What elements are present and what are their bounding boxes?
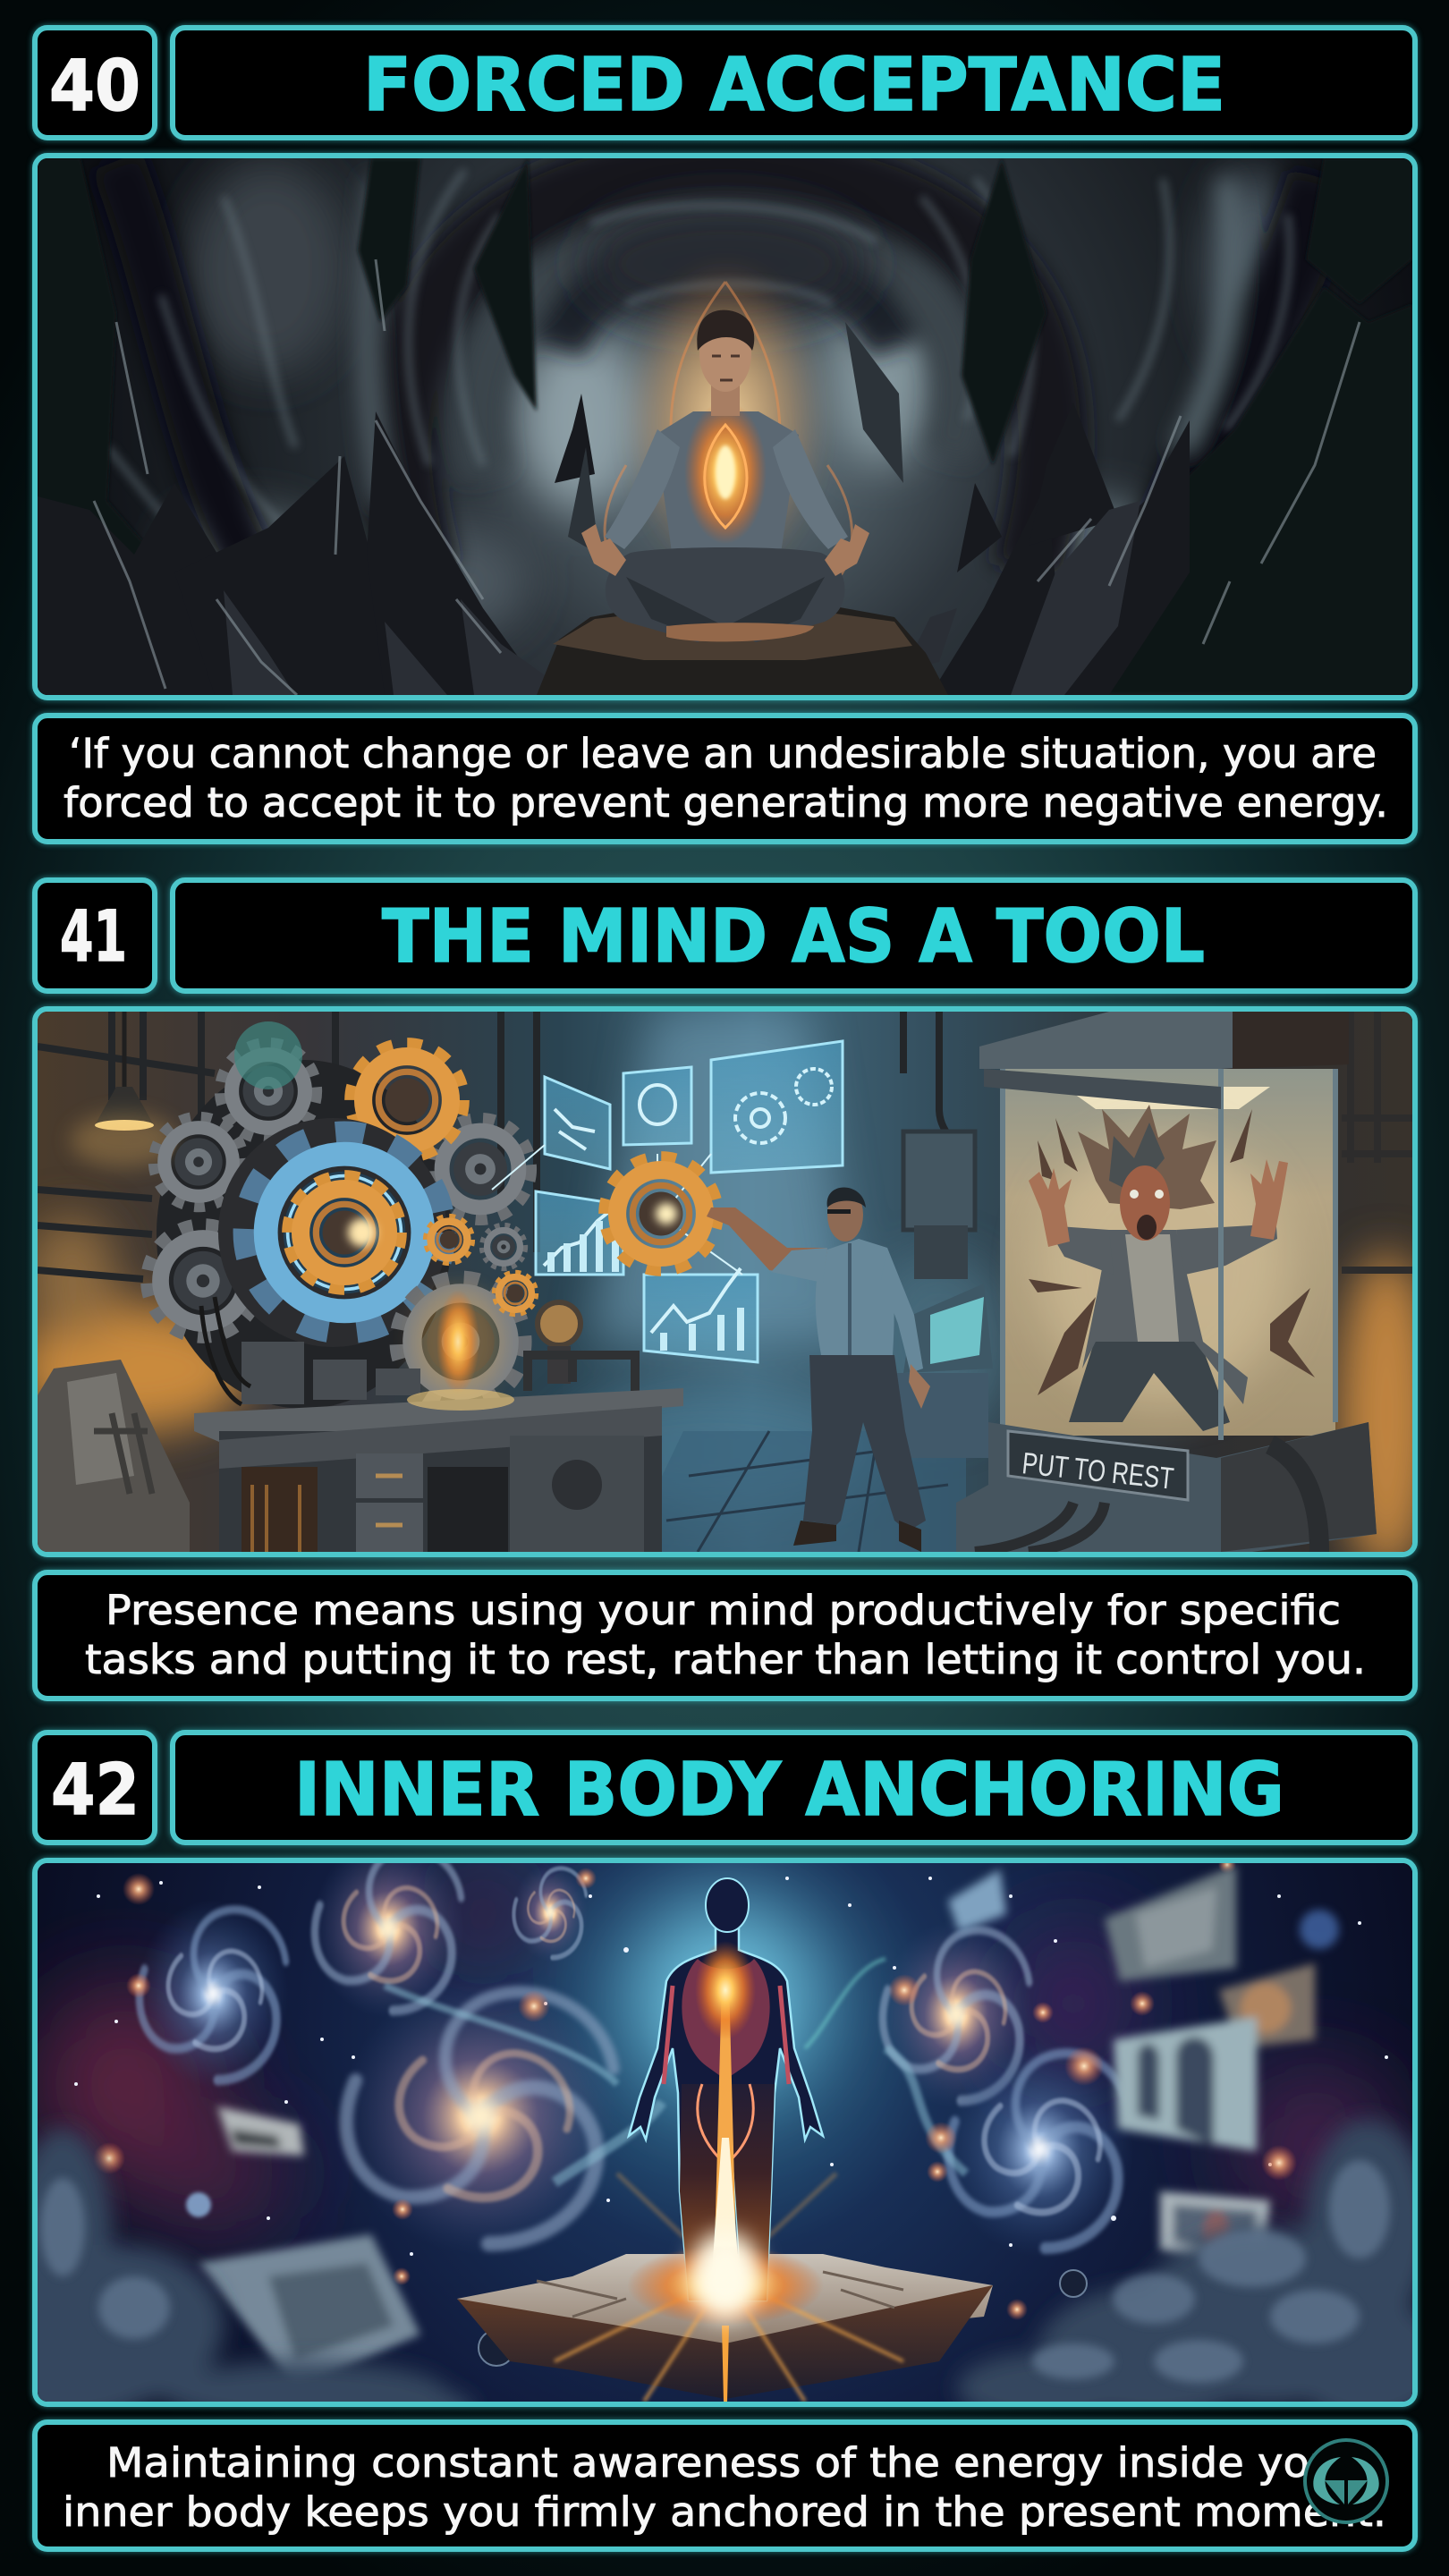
stars (74, 1877, 1388, 2256)
wall panels behind the man (903, 1131, 975, 1230)
glass highlights (1003, 1069, 1335, 1436)
machinery on desk (242, 1342, 420, 1404)
gear cluster (222, 1045, 315, 1138)
energy beam (353, 1229, 501, 1236)
gauge (538, 1302, 580, 1384)
storm streaks (107, 170, 1342, 581)
hanging lamp (71, 1012, 178, 1167)
heading: inner body anchoring (170, 1730, 1418, 1845)
workbench (194, 1388, 683, 1552)
number badge 40 (32, 25, 157, 140)
number badge 42 (32, 1730, 157, 1845)
caption 42 with logo: inner body keeps you firmly anchored in the present moment. (63, 2488, 1386, 2536)
jacket (1082, 1230, 1248, 1404)
heading: inner body anchoring: INNER BODY ANCHORING (294, 1748, 1284, 1833)
man pointing (707, 1188, 930, 1552)
machine backing (157, 1060, 452, 1409)
trousers (1069, 1337, 1230, 1431)
wisps (385, 1959, 966, 2182)
caption 41: tasks and putting it to rest, rather than letting it control you. (85, 1636, 1366, 1683)
heading: forced acceptance (170, 25, 1418, 140)
hands (581, 524, 626, 576)
nebulae (36, 1878, 1395, 2227)
number badge 40: 40 (49, 47, 140, 127)
heading: the mind as a tool (170, 877, 1418, 994)
caption 42 with logo: Maintaining constant awareness of the energy inside your (106, 2439, 1355, 2487)
panel: glowing body amid galaxies (32, 1858, 1418, 2407)
logo badge (1305, 2440, 1387, 2522)
flying shards (1029, 1109, 1315, 1395)
hands (1029, 1168, 1072, 1247)
caption 40: ‘If you cannot change or leave an undesirable situation, you are (69, 730, 1377, 777)
cloud banks (0, 2120, 1449, 2433)
glass case with raging mind (1003, 1069, 1335, 1436)
caption 40 (32, 713, 1418, 844)
number badge 42: 42 (51, 1750, 140, 1831)
torso (656, 411, 799, 559)
figure aura (625, 259, 826, 581)
hologram panels (536, 1041, 843, 1362)
floor (626, 1431, 966, 1552)
caption 42 with logo (32, 2419, 1418, 2552)
number badge 41 (32, 877, 157, 994)
floating rock platform (457, 2254, 993, 2399)
light rays (555, 2174, 903, 2402)
rock spires (38, 158, 1412, 695)
floating memory frames (199, 1865, 1315, 2388)
caption 41 (32, 1570, 1418, 1701)
rock seat (537, 601, 948, 695)
heading: the mind as a tool: THE MIND AS A TOOL (382, 894, 1205, 979)
central energy column (714, 1981, 737, 2281)
head and hair (1078, 1105, 1216, 1209)
head (711, 376, 740, 416)
body silhouette (629, 1878, 823, 2301)
pointing target gear (607, 1160, 715, 1267)
wall pipes (38, 1012, 1412, 1279)
section 40 (29, 21, 1422, 848)
section 41 (29, 873, 1422, 1705)
legs (606, 547, 844, 642)
sign: put to rest (1008, 1431, 1188, 1500)
shared svg definitions (0, 0, 12, 12)
panel: meditating figure in a dark storm (32, 153, 1418, 700)
caption 40: forced to accept it to prevent generating more negative energy. (64, 779, 1388, 826)
left console (38, 1360, 190, 1552)
heading: forced acceptance: FORCED ACCEPTANCE (363, 43, 1225, 128)
case cap (979, 1012, 1349, 1069)
section 42 (29, 1726, 1422, 2556)
caption 41: Presence means using your mind productively for specific (106, 1587, 1341, 1634)
sign: put to rest: PUT TO REST (1021, 1446, 1175, 1496)
hoses (1270, 1445, 1319, 1552)
case base (956, 1422, 1377, 1552)
galaxies (137, 1900, 289, 2088)
panel: workshop with gears, holograms and the caged mind (32, 1006, 1418, 1557)
